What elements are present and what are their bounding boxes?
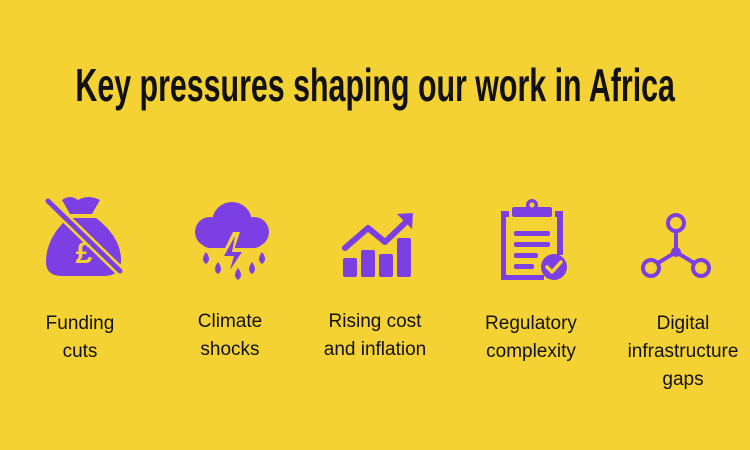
label: regulatory complexity bbox=[485, 313, 577, 362]
icon: clipboard check bbox=[501, 199, 567, 280]
label: regulatory complexity: complexity bbox=[486, 341, 576, 362]
icon: money bag crossed bbox=[46, 197, 121, 276]
label: climate shocks: shocks bbox=[200, 339, 260, 360]
icon: money bag crossed: £ bbox=[76, 237, 93, 270]
label: digital infrastructure gaps: gaps bbox=[662, 369, 704, 390]
label: funding cuts: cuts bbox=[63, 341, 97, 362]
label: rising cost: and inflation bbox=[324, 339, 426, 360]
label: regulatory complexity: Regulatory bbox=[485, 313, 577, 334]
label: funding cuts: Funding bbox=[46, 313, 114, 334]
icon: rising chart bbox=[343, 213, 413, 277]
label: rising cost: Rising cost bbox=[329, 311, 421, 332]
title: Key pressures shaping our work in Africa bbox=[75, 59, 675, 111]
icon: network nodes bbox=[643, 215, 709, 276]
label: digital infrastructure gaps: Digital bbox=[657, 313, 709, 334]
icon: storm cloud bbox=[195, 202, 269, 280]
label: funding cuts bbox=[46, 313, 114, 362]
label: digital infrastructure gaps bbox=[628, 313, 738, 390]
label: climate shocks: Climate bbox=[198, 311, 262, 332]
label: rising cost bbox=[324, 311, 426, 360]
label: digital infrastructure gaps: infrastructure bbox=[628, 341, 738, 362]
label: climate shocks bbox=[198, 311, 262, 360]
